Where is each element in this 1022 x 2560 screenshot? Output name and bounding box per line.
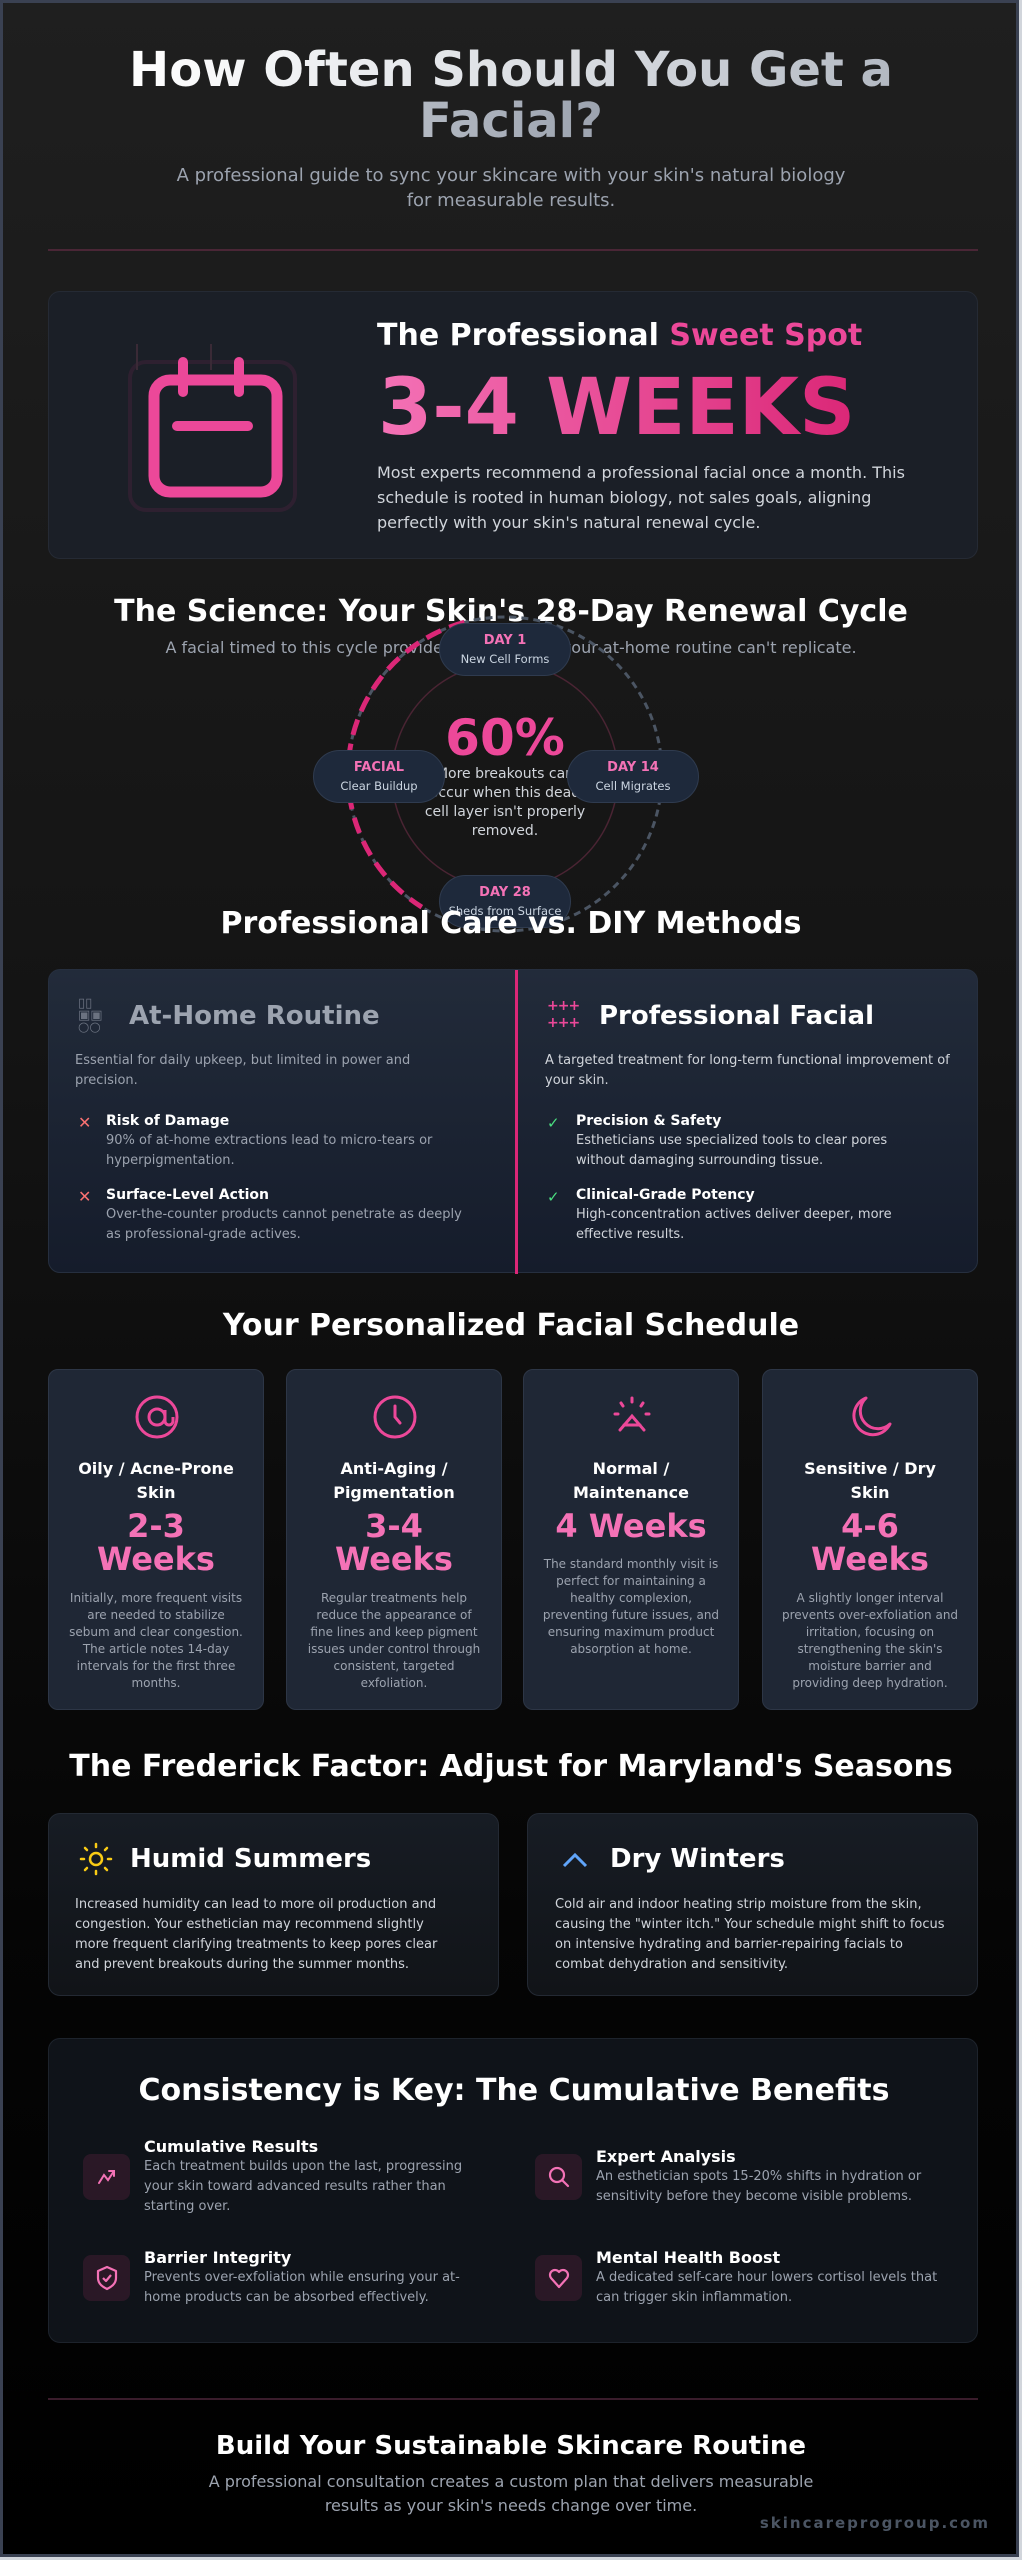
- item: surface-level: Surface-Level Action: [106, 1187, 269, 1203]
- card: anti-aging: Regular treatments help reduce the appearance of fine lines and keep pigment issues under control through consistent, targeted exfoliation.: [308, 1591, 480, 1690]
- subtitle: for measurable results.: [407, 190, 615, 211]
- card: oily: Weeks: [97, 1540, 215, 1578]
- item: precision: ✓: [547, 1114, 560, 1132]
- icon: sparkle: +++: [547, 1015, 579, 1031]
- benefit: expert analysis: Expert Analysis: [596, 2147, 736, 2166]
- title: How Often Should You Get a: [129, 42, 893, 98]
- subtitle: A professional guide to sync your skincare with your skin's natural biology: [177, 165, 845, 186]
- icon: chevron: [563, 1853, 587, 1867]
- heading: build routine: Build Your Sustainable Skincare Routine: [216, 2431, 806, 2461]
- pill: facial: FACIAL: [354, 760, 404, 775]
- benefit: cumulative results: Each treatment builds upon the last, progressing your skin toward advanced results rather than starting over.: [144, 2159, 462, 2214]
- item: potency: High-concentration actives deliver deeper, more effective results.: [576, 1207, 892, 1242]
- heading: at-home: At-Home Routine: [129, 1001, 380, 1031]
- text: closing: A professional consultation creates a custom plan that delivers measurable results as your skin's needs change over time.: [209, 2472, 813, 2515]
- text: at-home desc: Essential for daily upkeep, but limited in power and precision.: [75, 1053, 410, 1088]
- text: professional desc: A targeted treatment for long-term functional improvement of your skin.: [545, 1053, 950, 1088]
- icon: moon: [852, 1396, 892, 1436]
- item: risk of damage: Risk of Damage: [106, 1113, 229, 1129]
- icon: at sign: [136, 1396, 178, 1438]
- benefit: barrier integrity: Prevents over-exfoliation while ensuring your at-home products can be absorbed effectively.: [144, 2270, 460, 2305]
- item: potency: [547, 1187, 892, 1242]
- icon: calendar: [128, 344, 297, 512]
- pill: day 14: DAY 14: [607, 760, 659, 775]
- item: potency: ✓: [547, 1188, 560, 1206]
- text: dry winters: Cold air and indoor heating strip moisture from the skin, causing the "winter itch." Your schedule might shift to focus on intensive hydrating and barrier-repairing facials to combat dehydration and sensitivity.: [555, 1897, 945, 1972]
- item: precision: [547, 1113, 887, 1168]
- card: anti-aging: Anti-Aging / Pigmentation: [333, 1459, 455, 1502]
- pill: day 14: [567, 750, 699, 803]
- card: anti-aging: [286, 1369, 502, 1710]
- heading: professional: Professional Facial: [599, 1001, 874, 1031]
- icon: sparkle: +++: [547, 998, 579, 1014]
- item: surface-level: [78, 1187, 462, 1242]
- card: normal: Normal / Maintenance: [573, 1459, 689, 1502]
- card: normal: 4 Weeks: [555, 1507, 707, 1545]
- heading: science: The Science: Your Skin's 28-Day Renewal Cycle: [114, 594, 908, 629]
- panel: consistency: [48, 2038, 978, 2343]
- pill: day 28: DAY 28: [479, 885, 531, 900]
- column: at-home: [75, 996, 462, 1242]
- benefit: mental health: Mental Health Boost: [596, 2248, 780, 2267]
- panel: dry winters: [527, 1813, 978, 1996]
- benefit: mental health: A dedicated self-care hour lowers cortisol levels that can trigger skin inflammation.: [596, 2270, 937, 2305]
- benefit: expert analysis: An esthetician spots 15-20% shifts in hydration or sensitivity before they become visible problems.: [596, 2169, 921, 2204]
- chart: renewal cycle: [313, 616, 699, 932]
- item: risk of damage: [78, 1113, 432, 1168]
- text: sweet spot paragraph: Most experts recommend a professional facial once a month. This schedule is rooted in human biology, not sales goals, aligning perfectly with your skin's natural renewal cycle.: [377, 463, 905, 532]
- item: potency: Clinical-Grade Potency: [576, 1187, 755, 1203]
- benefit: cumulative results: Cumulative Results: [144, 2137, 318, 2156]
- panel: humid summers: [48, 1813, 499, 1996]
- card: sensitive: Weeks: [811, 1540, 929, 1578]
- card: sensitive: A slightly longer interval prevents over-exfoliation and irritation, focusing on strengthening the skin's moisture barrier and providing deep hydration.: [782, 1591, 958, 1690]
- icon: sunrise: [614, 1396, 650, 1432]
- title: Facial?: [419, 93, 603, 149]
- card: sensitive: Sensitive / Dry Skin: [804, 1459, 936, 1502]
- footer: url: skincareprogroup.com: [760, 2514, 990, 2532]
- subtitle: [176, 165, 845, 211]
- text: humid summers: Increased humidity can lead to more oil production and congestion. Your esthetician may recommend slightly more frequent clarifying treatments to keep pores clear and prevent breakouts during the summer months.: [75, 1897, 437, 1972]
- card: sensitive: [762, 1369, 978, 1710]
- heading: pro vs diy: Professional Care vs. DIY Methods: [221, 906, 801, 941]
- icon: at-home: ○○: [78, 1020, 101, 1035]
- pill: facial: Clear Buildup: [340, 779, 418, 793]
- big number: 3-4 WEEKS: [378, 363, 855, 453]
- pill: day 28: [439, 875, 571, 928]
- card: normal: The standard monthly visit is perfect for maintaining a healthy complexion, preventing future issues, and ensuring maximum product absorption at home.: [543, 1557, 719, 1656]
- card: oily: Initially, more frequent visits are needed to stabilize sebum and clear congestion. The article notes 14-day intervals for the first three months.: [69, 1591, 243, 1690]
- benefit: barrier integrity: Barrier Integrity: [144, 2248, 291, 2267]
- icon: sun: [80, 1842, 112, 1876]
- text: stat description: More breakouts can occur when this dead cell layer isn't properly removed.: [425, 766, 585, 839]
- heading: frederick factor: The Frederick Factor: Adjust for Maryland's Seasons: [69, 1749, 953, 1784]
- item: risk of damage: 90% of at-home extractions lead to micro-tears or hyperpigmentation.: [106, 1133, 432, 1168]
- card: oily: 2-3: [127, 1507, 185, 1545]
- icon: clock: [374, 1396, 416, 1438]
- heading: humid summers: Humid Summers: [130, 1844, 371, 1874]
- card: oily: Oily / Acne-Prone Skin: [78, 1459, 234, 1502]
- heading: schedule: Your Personalized Facial Schedule: [223, 1308, 799, 1343]
- pill: day 14: Cell Migrates: [596, 779, 670, 793]
- card: anti-aging: 3-4: [365, 1507, 423, 1545]
- stat: 60%: 60%: [445, 709, 565, 767]
- benefit: mental health: [535, 2248, 937, 2305]
- benefit: barrier integrity: [83, 2248, 460, 2305]
- benefit: expert analysis: [535, 2147, 922, 2204]
- icon: at-home: ▣▣: [78, 1008, 103, 1023]
- card: oily: [48, 1369, 264, 1710]
- pill: facial: [313, 750, 445, 803]
- column: professional: [545, 998, 950, 1242]
- heading: consistency: Consistency is Key: The Cumulative Benefits: [139, 2073, 889, 2108]
- card: sensitive: 4-6: [841, 1507, 899, 1545]
- icon: at-home: [78, 996, 103, 1035]
- pill: day 1: [439, 623, 571, 676]
- pill: day 1: New Cell Forms: [461, 652, 549, 666]
- item: risk of damage: ✕: [78, 1113, 91, 1132]
- card: anti-aging: Weeks: [335, 1540, 453, 1578]
- pill: day 28: Sheds from Surface: [449, 904, 561, 918]
- item: precision: Precision & Safety: [576, 1113, 721, 1129]
- item: precision: Estheticians use specialized tools to clear pores without damaging surrounding tissue.: [576, 1133, 887, 1168]
- item: surface-level: ✕: [78, 1187, 91, 1206]
- subtitle: science: A facial timed to this cycle provides a deep reset your at-home routine can't replicate.: [165, 638, 857, 657]
- heading: dry winters: Dry Winters: [610, 1844, 785, 1874]
- panel: sweet spot: [48, 291, 978, 559]
- card: normal: [523, 1369, 739, 1710]
- panel: comparison: [48, 969, 978, 1273]
- benefit: cumulative results: [83, 2137, 462, 2214]
- icon: sparkle: [547, 998, 579, 1031]
- title: [129, 42, 893, 149]
- pill: day 1: DAY 1: [484, 633, 526, 648]
- item: surface-level: Over-the-counter products cannot penetrate as deeply as professional-grade actives.: [106, 1207, 462, 1242]
- icon: at-home: ▯▯: [78, 996, 92, 1011]
- heading: sweet spot: The Professional Sweet Spot: [377, 318, 862, 353]
